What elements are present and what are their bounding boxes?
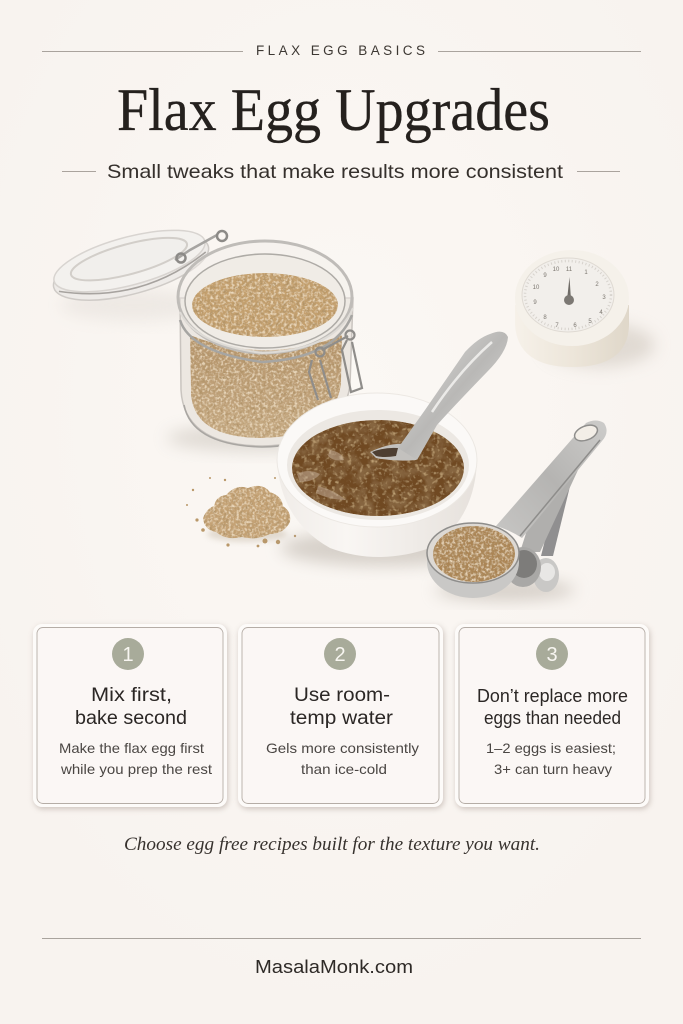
description: 1–2 eggs is easiest; <box>486 740 616 756</box>
description <box>486 740 616 777</box>
subtitle: Small tweaks that make results more consistent <box>107 161 564 183</box>
icon: spoon in bowl <box>370 332 508 461</box>
title: Flax Egg Upgrades <box>117 77 550 143</box>
heading: Don’t replace more <box>477 686 628 706</box>
flax gel <box>292 420 464 516</box>
description <box>59 740 212 777</box>
panel: tip 1 <box>33 624 228 809</box>
panel: tip 3 <box>455 624 650 809</box>
icon: nested measuring spoons with flax <box>427 420 607 601</box>
panel: tip 2 <box>238 624 444 809</box>
photo: flax egg still life <box>46 217 655 601</box>
heading <box>290 685 394 729</box>
icon: timer: 11 <box>566 267 573 273</box>
number badge 3 <box>536 638 568 670</box>
icon: timer: 3 <box>602 295 606 301</box>
icon: timer: 4 <box>599 310 603 316</box>
icon: small pile of ground flax <box>186 477 296 547</box>
heading: bake second <box>75 708 187 729</box>
icon: timer: 2 <box>595 282 599 288</box>
number badge 1 <box>112 638 144 670</box>
footer: MasalaMonk.com <box>255 957 413 977</box>
heading: eggs than needed <box>484 708 621 728</box>
icon: jar clasp <box>309 330 362 400</box>
number badge 2 <box>324 638 356 670</box>
icon: white bowl of flax gel <box>277 393 490 566</box>
icon: timer: 10 <box>533 285 540 291</box>
description: than ice-cold <box>301 761 387 777</box>
eyebrow rule: FLAX EGG BASICS: FLAX EGG BASICS <box>256 43 425 58</box>
closing note: Choose egg free recipes built for the texture you want. <box>124 834 540 855</box>
heading <box>477 686 628 728</box>
description: Gels more consistently <box>266 740 419 756</box>
heading: Mix first, <box>91 685 172 706</box>
number badge 1: 1 <box>122 644 134 666</box>
description: 3+ can turn heavy <box>494 761 612 777</box>
icon: timer: 6 <box>573 323 577 329</box>
description: while you prep the rest <box>60 761 212 777</box>
heading: Use room- <box>294 685 390 706</box>
heading <box>75 685 187 729</box>
icon: timer: 10 <box>553 267 560 273</box>
icon: glass jar of ground flax <box>167 241 357 452</box>
description: Make the flax egg first <box>59 740 204 756</box>
icon: timer: 9 <box>533 300 537 306</box>
icon: timer: 5 <box>588 319 592 325</box>
icon: jar lid <box>46 217 227 321</box>
heading: temp water <box>290 708 394 729</box>
icon: timer: 9 <box>543 273 547 279</box>
icon: timer <box>515 250 655 367</box>
icon: timer: 1 <box>584 270 588 276</box>
icon: timer: 8 <box>543 315 547 321</box>
number badge 2: 2 <box>334 644 346 666</box>
number badge 3: 3 <box>546 644 558 666</box>
description <box>266 740 419 777</box>
icon: timer: 7 <box>555 323 559 329</box>
